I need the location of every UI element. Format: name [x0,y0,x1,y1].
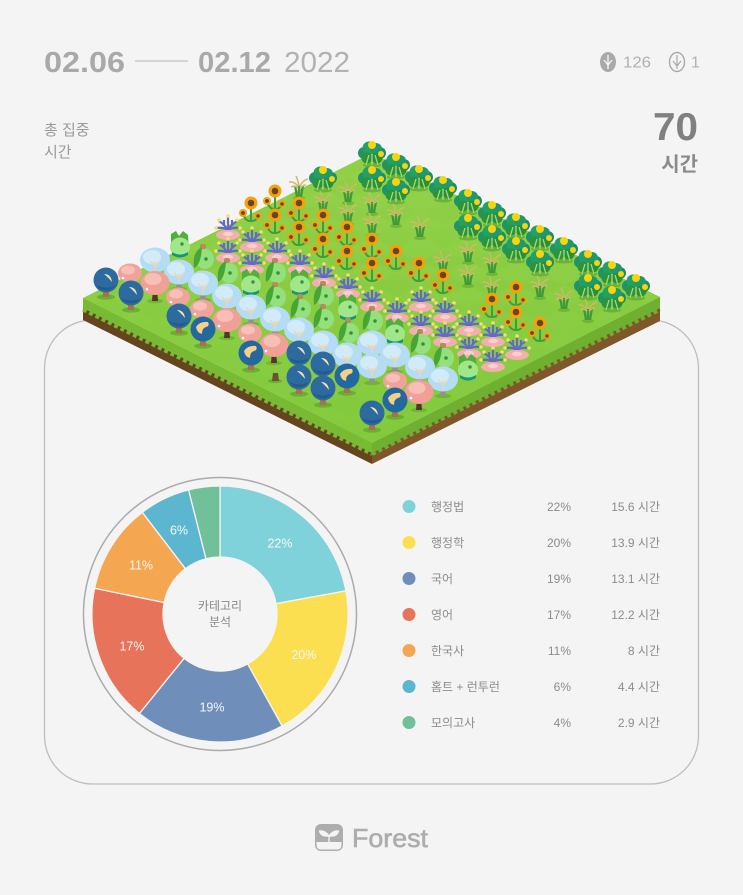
legend row: 행정법: 22% [547,500,571,514]
chart slices [92,486,348,742]
panel: category outline [44,320,698,784]
legend row: 영어: 영어 [431,608,453,622]
legend row: 모의고사: 2.9 시간 [618,716,660,730]
chart percentage labels [119,524,317,714]
legend row: 홈트 + 런투런: 6% [554,680,571,694]
healthy tree count: 126 [623,54,651,72]
legend row: 행정학: 20% [547,536,571,550]
legend row: 행정학 [402,535,660,550]
total focus time value: 시간 [661,153,698,176]
legend row: 영어 [402,608,660,622]
legend row: 모의고사 [402,716,660,730]
legend row: 홈트 + 런투런: 4.4 시간 [618,680,660,694]
legend [402,499,660,730]
chart percentage labels: 22% [267,536,293,550]
donut chart [84,478,356,750]
legend row: 국어: 19% [547,572,571,586]
plants: grass tufts [289,176,597,323]
legend row: 한국사: 한국사 [431,644,464,658]
trees: pink blossom [118,264,434,412]
legend row: 한국사 [402,644,660,658]
header: date range [44,47,350,79]
plants: yellow flower bushes [309,141,650,312]
total focus time value: 70 [653,106,698,149]
chart center label: 카테고리 [198,599,242,613]
plants: green leaf sprouts [170,231,478,380]
wordmark: Forest [352,823,429,853]
legend row: 홈트 + 런투런 [402,680,660,694]
total focus time label: 총 집중 [44,122,90,139]
total focus time value [653,106,698,176]
legend row: 행정법: 15.6 시간 [611,500,660,514]
trees: dark blue moon [94,268,408,433]
chart percentage labels: 11% [129,558,153,572]
plants: sunflowers [239,184,551,342]
trees: light blue [140,248,458,398]
icon: healthy tree [600,52,616,72]
ground block [83,153,660,464]
legend row: 행정법: 행정법 [431,499,464,514]
isometric forest [83,141,660,464]
legend row: 영어: 12.2 시간 [611,608,660,622]
header: date range: 2022 [284,47,350,79]
legend row: 모의고사: 4% [554,716,571,730]
chart percentage labels: 20% [291,648,317,662]
chart percentage labels: 19% [199,700,225,714]
total focus time label: 시간 [44,144,72,161]
legend row: 행정학: 13.9 시간 [611,536,660,550]
icon: Forest app [315,824,343,851]
legend row: 모의고사: 모의고사 [431,716,475,730]
legend row: 한국사: 8 시간 [628,644,660,658]
chart center label: 분석 [209,615,231,629]
chart percentage labels: 6% [170,524,188,538]
legend row: 국어 [402,572,660,586]
chart percentage labels: 17% [119,640,145,654]
brand logo [315,823,429,853]
legend row: 행정법 [402,499,660,514]
legend row: 영어: 17% [547,608,571,622]
plants: pink and blue flowers [214,214,531,372]
total focus time label [44,122,90,161]
tree stump [268,373,282,383]
legend row: 국어: 국어 [431,572,453,586]
chart center label [198,599,242,629]
legend row: 홈트 + 런투런: 홈트 + 런투런 [431,680,500,694]
icon: dead tree [670,52,684,72]
header: tree counts [600,52,700,72]
legend row: 국어: 13.1 시간 [611,572,660,586]
legend row: 한국사: 11% [548,644,571,658]
header: date range: 02.12 [198,47,271,79]
legend row: 행정학: 행정학 [431,535,464,550]
header: date range: 02.06 [44,47,125,79]
dead tree count: 1 [691,54,700,72]
chart outer ring [84,478,356,750]
